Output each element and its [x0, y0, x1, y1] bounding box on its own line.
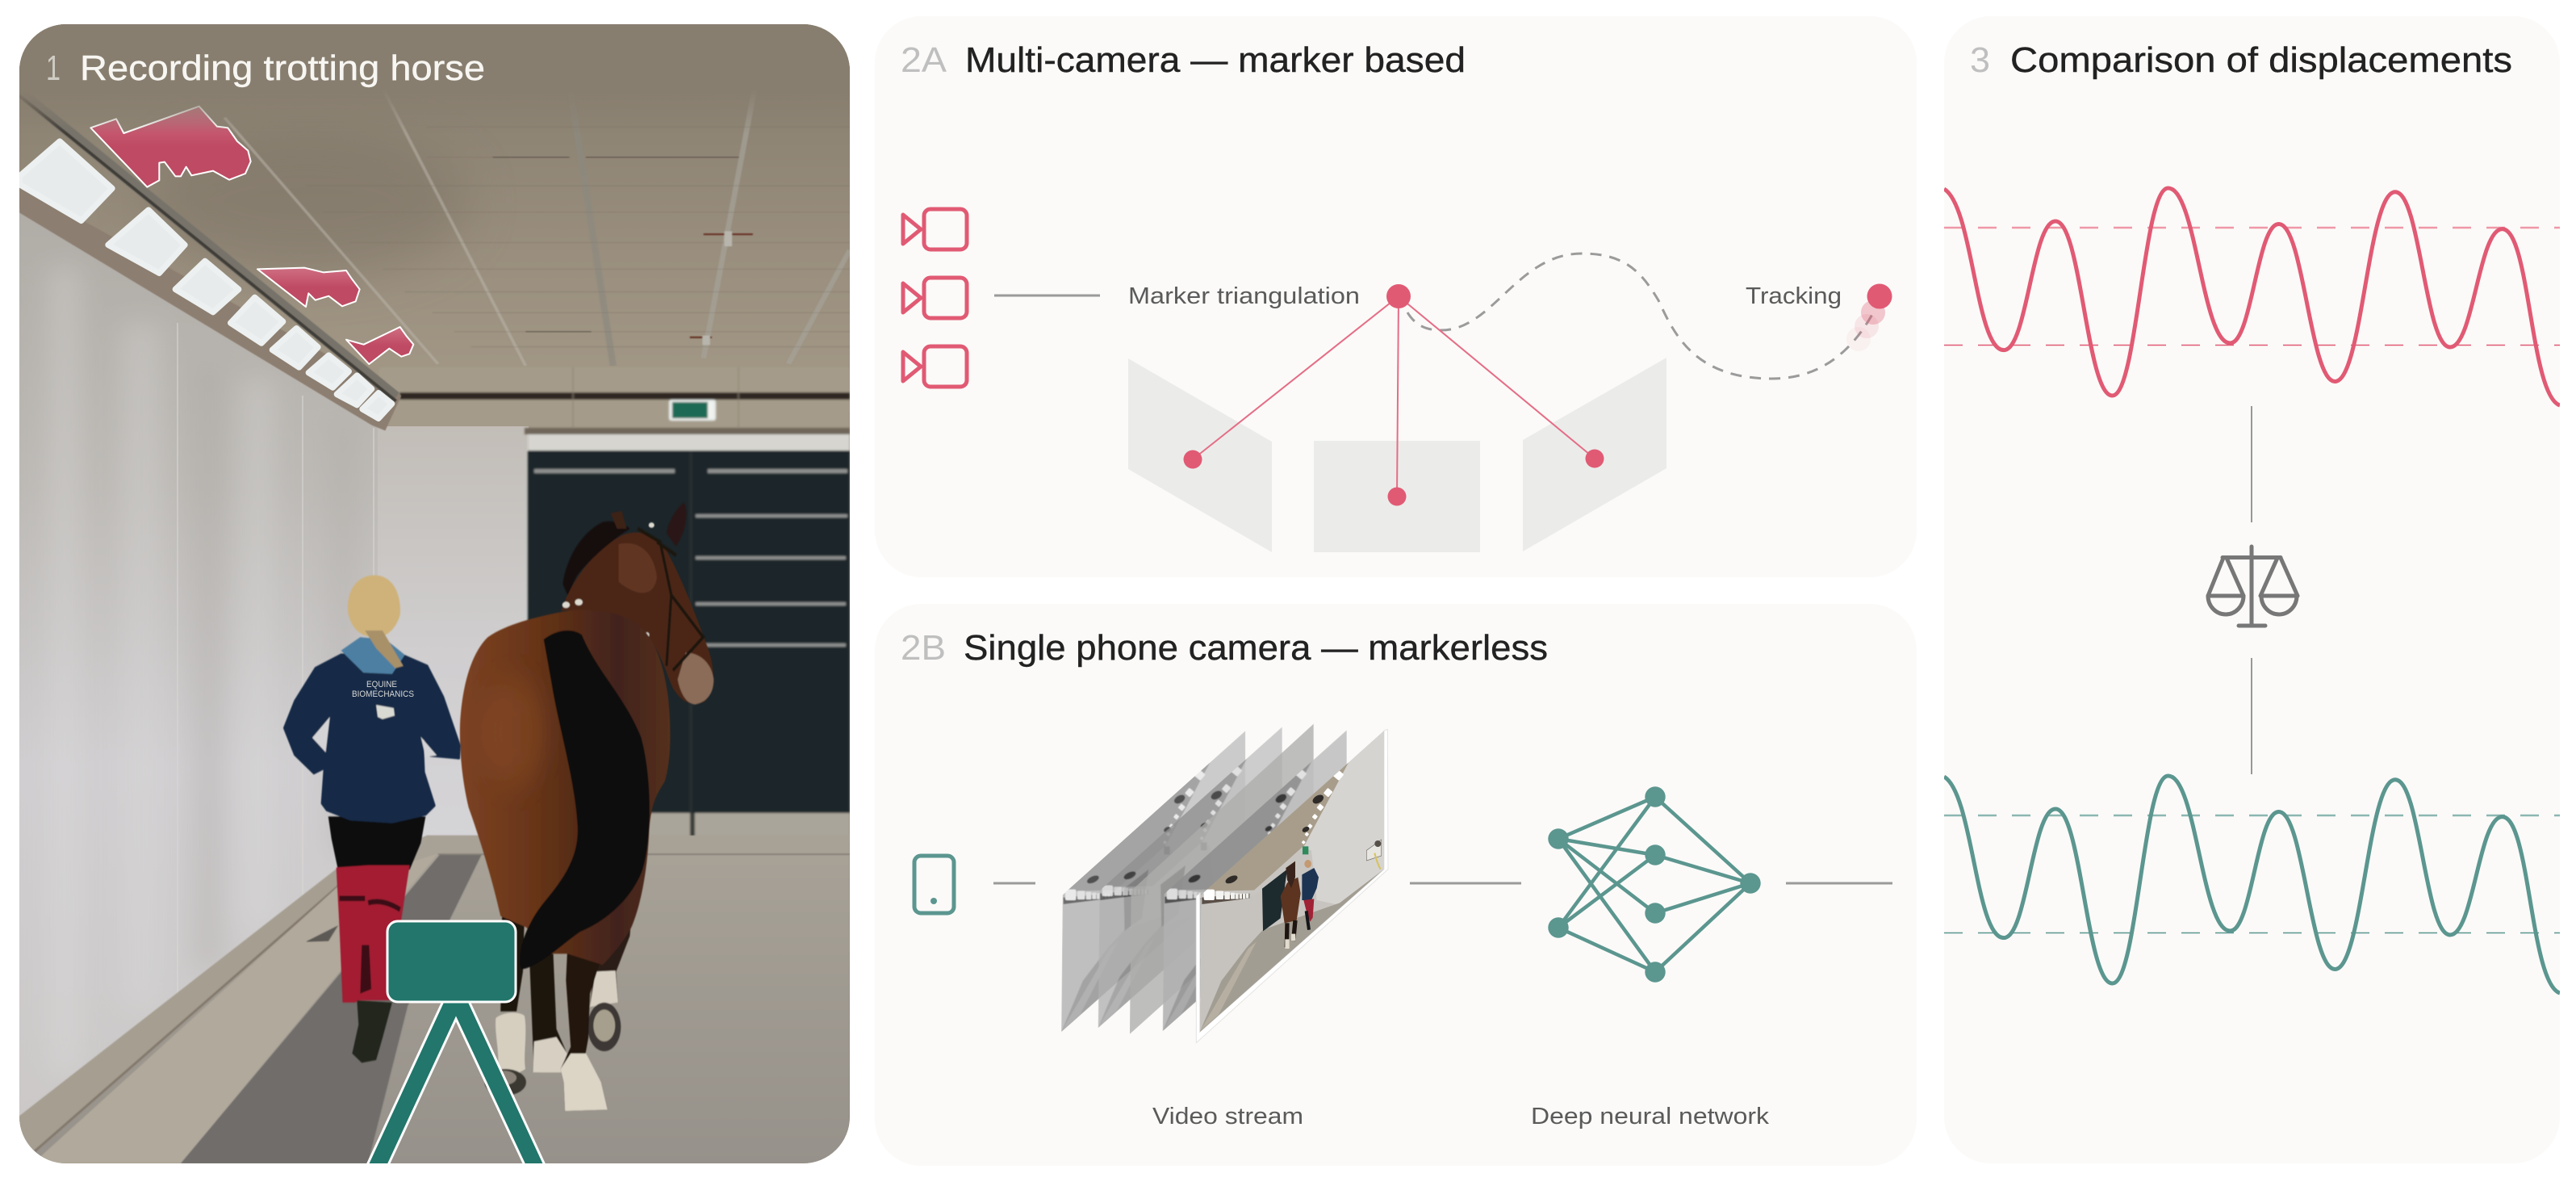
person and horse in frame — [1281, 860, 1319, 949]
left and back walls — [19, 208, 529, 1138]
camera view planes — [1128, 358, 1666, 552]
person running — [284, 575, 460, 1062]
icon: ceiling camera three — [346, 327, 413, 364]
back wall header with beam — [387, 391, 850, 427]
panel: 2B single phone camera markerless — [875, 604, 1917, 1166]
label: deep neural network: Deep neural network — [1531, 1104, 1770, 1129]
heading: 2B: 2B — [901, 628, 946, 668]
jacket lettering: EQUINE — [366, 680, 397, 689]
horse tail — [520, 631, 650, 970]
jacket lettering — [352, 681, 414, 697]
tracking path — [1407, 254, 1877, 379]
jacket lettering: BIOMECHANICS — [352, 689, 414, 699]
lights — [19, 141, 392, 418]
floor — [13, 836, 850, 1163]
horse body — [460, 610, 670, 965]
icon: ceiling camera one — [90, 107, 251, 187]
label: marker triangulation: Marker triangulation — [1128, 283, 1360, 309]
neural network — [1548, 786, 1761, 983]
heading: 2A: 2A — [901, 40, 947, 80]
horse — [460, 502, 713, 1111]
heading: recording trotting horse: Recording trotting horse — [80, 48, 485, 88]
heading: 2A: Multi-camera — marker based — [965, 40, 1466, 80]
rail, light beam and fixtures — [19, 91, 413, 430]
chart: marker based displacement — [1944, 188, 2560, 405]
icon: balance scale — [2208, 547, 2298, 626]
heading: 2B: Single phone camera — markerless — [964, 628, 1548, 668]
triangulation rays — [1193, 296, 1595, 497]
horse neck and head — [561, 502, 713, 705]
horse hind legs — [485, 910, 632, 1111]
heading: 3: Comparison of displacements — [2010, 40, 2512, 80]
label: video stream: Video stream — [1152, 1104, 1303, 1129]
icon: phone on tripod — [367, 921, 545, 1165]
markers — [1183, 284, 1604, 505]
chart: markerless displacement — [1944, 776, 2560, 993]
video stream frames — [1050, 724, 1388, 1043]
exit sign — [669, 400, 716, 421]
ceiling — [19, 24, 850, 367]
comparison line lower — [2251, 658, 2252, 774]
heading: 3: 3 — [1970, 40, 1990, 80]
icon: phone — [914, 856, 954, 913]
connector lines — [993, 882, 1892, 885]
heading: recording trotting horse: 1 — [46, 48, 61, 88]
icon: ceiling camera two — [257, 268, 360, 307]
icon: three cameras — [903, 209, 967, 387]
panel: 2A multi-camera marker based — [875, 16, 1917, 577]
doors — [525, 428, 850, 842]
comparison line upper — [2251, 406, 2252, 522]
panel: 3 comparison of displacements — [1944, 16, 2560, 1163]
tracked marker with trail — [1846, 284, 1892, 351]
panel: recording trotting horse photo — [13, 24, 850, 1165]
label: tracking: Tracking — [1746, 283, 1842, 309]
connector line — [994, 294, 1100, 297]
